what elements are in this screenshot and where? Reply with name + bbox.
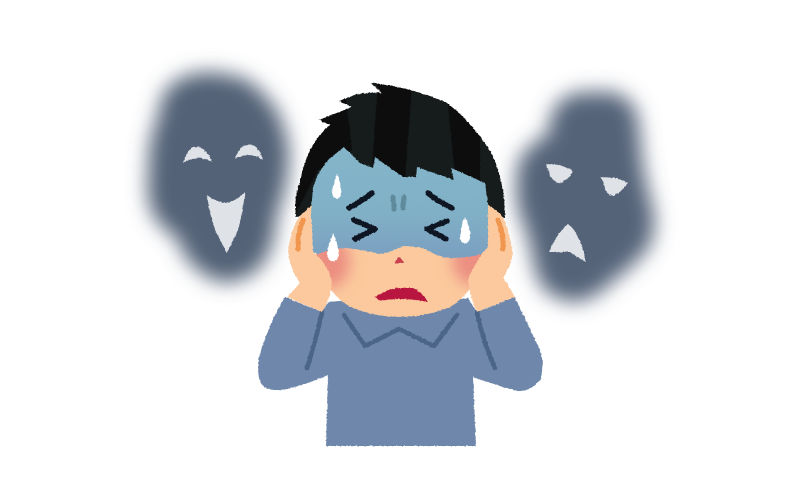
sweater xyxy=(258,297,542,446)
ghost grinning mouth xyxy=(207,192,245,253)
hair xyxy=(296,83,505,218)
right hand xyxy=(468,205,515,312)
left hand xyxy=(287,205,332,312)
left eyebrow xyxy=(349,193,372,208)
ghost right eye angry xyxy=(601,177,628,196)
left sleeve crease xyxy=(307,312,322,368)
right cheek blush xyxy=(446,253,482,290)
ghost: right angry face xyxy=(516,92,654,302)
left squeezed eye xyxy=(354,220,375,239)
nose xyxy=(395,257,404,263)
left ear xyxy=(298,220,303,249)
mouth xyxy=(375,288,428,302)
hair dark stripes xyxy=(295,84,480,214)
man xyxy=(258,80,542,446)
sweat drop left bottom xyxy=(327,233,339,261)
illustration: man covering ears with ghostly faces xyxy=(132,57,670,446)
left cheek blush xyxy=(316,248,357,294)
ghost body left xyxy=(148,72,289,282)
ghost left eye xyxy=(183,147,212,163)
right ear xyxy=(498,220,503,249)
ghost: left laughing face xyxy=(148,72,289,282)
ghost left eye angry xyxy=(546,164,572,183)
collar xyxy=(344,315,457,346)
right squeezed eye xyxy=(427,221,447,239)
ghost body right xyxy=(516,92,654,302)
right sleeve crease xyxy=(477,312,495,368)
blue shadow across upper face xyxy=(311,147,488,258)
worry lines xyxy=(393,197,404,209)
right eyebrow xyxy=(428,193,452,208)
ghost frowning mouth xyxy=(549,224,586,262)
sweat drop right xyxy=(460,217,470,243)
face xyxy=(311,210,489,317)
ghost right eye xyxy=(235,145,263,160)
sweat drop left top xyxy=(332,174,341,199)
